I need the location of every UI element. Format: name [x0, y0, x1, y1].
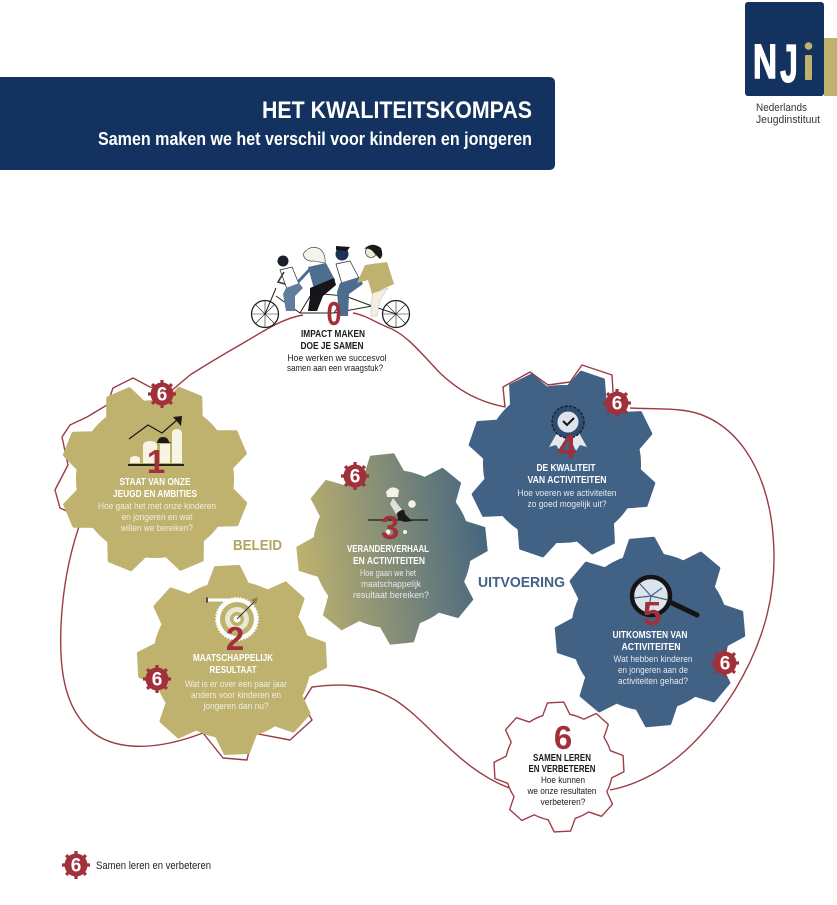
icon: rosette with check — [549, 406, 587, 451]
woman with khaki top — [357, 245, 394, 316]
badge 6 at gear 2: 6 — [152, 670, 162, 690]
badge 6 at gear 2 — [143, 665, 171, 693]
header banner — [0, 77, 555, 170]
legend — [62, 851, 211, 879]
badge 6 at gear 1: 6 — [157, 384, 167, 406]
gear 5 text: Wat hebben kinderen — [614, 654, 692, 664]
gear 6 text: we onze resultaten — [527, 786, 596, 796]
badge 6 at gear 1 — [148, 380, 176, 408]
gear 4 text: Hoe voeren we activiteiten — [518, 488, 616, 498]
gear 3 text: VERANDERVERHAAL — [347, 543, 429, 555]
gear 5 text: en jongeren aan de — [618, 665, 688, 675]
gear 2: maatschappelijk resultaat — [134, 562, 330, 758]
gear 3 text: EN ACTIVITEITEN — [353, 555, 425, 567]
step 0 text: IMPACT MAKEN — [301, 328, 365, 340]
connecting red path — [55, 313, 774, 790]
label: beleid: BELEID — [233, 537, 282, 554]
icon: magnifying glass — [632, 577, 697, 615]
step 0 text: samen aan een vraagstuk? — [287, 363, 383, 373]
logo NJi: N — [753, 36, 777, 89]
icon: balancing figure — [368, 487, 428, 534]
wheels and frame — [251, 288, 410, 328]
woman with blond hair — [298, 247, 336, 311]
logo NJi: J — [780, 34, 798, 94]
logo NJi — [745, 2, 837, 126]
number 0: 0 — [326, 295, 342, 332]
gear 3 text — [347, 543, 429, 600]
gear 6 text: EN VERBETEREN — [528, 763, 596, 775]
legend: 6 — [71, 856, 81, 876]
gear 4: kwaliteit van activiteiten — [444, 346, 680, 582]
number 2: 2 — [226, 620, 244, 657]
gear 3: veranderverhaal — [288, 445, 496, 653]
gear 4 text: zo goed mogelijk uit? — [528, 499, 606, 509]
gear 1 text: en jongeren en wat — [122, 512, 193, 522]
gear 2 text — [185, 652, 287, 711]
gear 5: uitkomsten van activiteiten — [549, 531, 751, 733]
gear 6 text: SAMEN LEREN — [533, 752, 591, 764]
gear 2 text: anders voor kinderen en — [191, 690, 281, 700]
badge 6 at gear 5 — [711, 649, 739, 677]
gear 4 text: DE KWALITEIT — [536, 462, 596, 474]
gear 2 text: MAATSCHAPPELIJK — [193, 652, 273, 664]
label: uitvoering: UITVOERING — [478, 574, 565, 591]
step 0 text: DOE JE SAMEN — [300, 340, 364, 352]
gear 6 text: Hoe kunnen — [541, 775, 585, 785]
gear 5 text: ACTIVITEITEN — [622, 641, 680, 653]
number 5: 5 — [643, 595, 661, 632]
icon: target with arrow — [207, 597, 258, 640]
number 4: 4 — [558, 428, 577, 465]
number 1: 1 — [147, 443, 165, 480]
gear 5 text: activiteiten gehad? — [618, 676, 688, 686]
gear 6: samen leren en verbeteren — [491, 699, 627, 835]
man with cap — [336, 246, 363, 316]
child — [278, 256, 303, 311]
step 0 text — [287, 328, 386, 373]
badge 6 at gear 5: 6 — [720, 654, 730, 674]
gear 5 text: UITKOMSTEN VAN — [612, 629, 688, 641]
gear 1 text: STAAT VAN ONZE — [120, 476, 190, 488]
icon: bar chart with arrow — [128, 416, 184, 465]
badge 6 at gear 4 — [603, 389, 631, 417]
gear 1 text: willen we bereiken? — [120, 523, 193, 533]
gear 1 text — [98, 476, 216, 533]
gear 6 text — [527, 752, 596, 807]
gear 1 text: JEUGD EN AMBITIES — [113, 488, 197, 500]
badge 6 at gear 3 — [341, 462, 369, 490]
gear 1 text: Hoe gaat het met onze kinderen — [98, 501, 216, 511]
number 3: 3 — [381, 509, 399, 546]
number 6: 6 — [554, 719, 572, 756]
legend: Samen leren en verbeteren — [96, 860, 211, 872]
gear 2 text: Wat is er over een paar jaar — [185, 679, 287, 689]
gear 1: staat van onze jeugd — [34, 358, 276, 600]
badge 6 at gear 4: 6 — [612, 394, 622, 414]
gear 4 text — [518, 462, 616, 509]
illustration: four people on a tandem bike — [251, 245, 410, 328]
gear 2 text: jongeren dan nu? — [203, 701, 268, 711]
gear 3 text: resultaat bereiken? — [353, 590, 429, 600]
title: HET KWALITEITSKOMPAS — [262, 97, 532, 124]
badge 6 at gear 3: 6 — [350, 466, 360, 488]
gear 5 text — [612, 629, 692, 686]
gear 4 text: VAN ACTIVITEITEN — [528, 474, 606, 486]
step 0 text: Hoe werken we succesvol — [288, 353, 386, 363]
subtitle: Samen maken we het verschil voor kinderen en jongeren — [98, 129, 532, 149]
gear 3 text: Hoe gaan we het — [360, 568, 416, 578]
gear 3 text: maatschappelijk — [361, 579, 421, 589]
logo NJi: Jeugdinstituut — [756, 114, 820, 126]
gear 2 text: RESULTAAT — [210, 664, 257, 676]
logo NJi: Nederlands — [756, 102, 807, 114]
gear 6 text: verbeteren? — [540, 797, 586, 807]
